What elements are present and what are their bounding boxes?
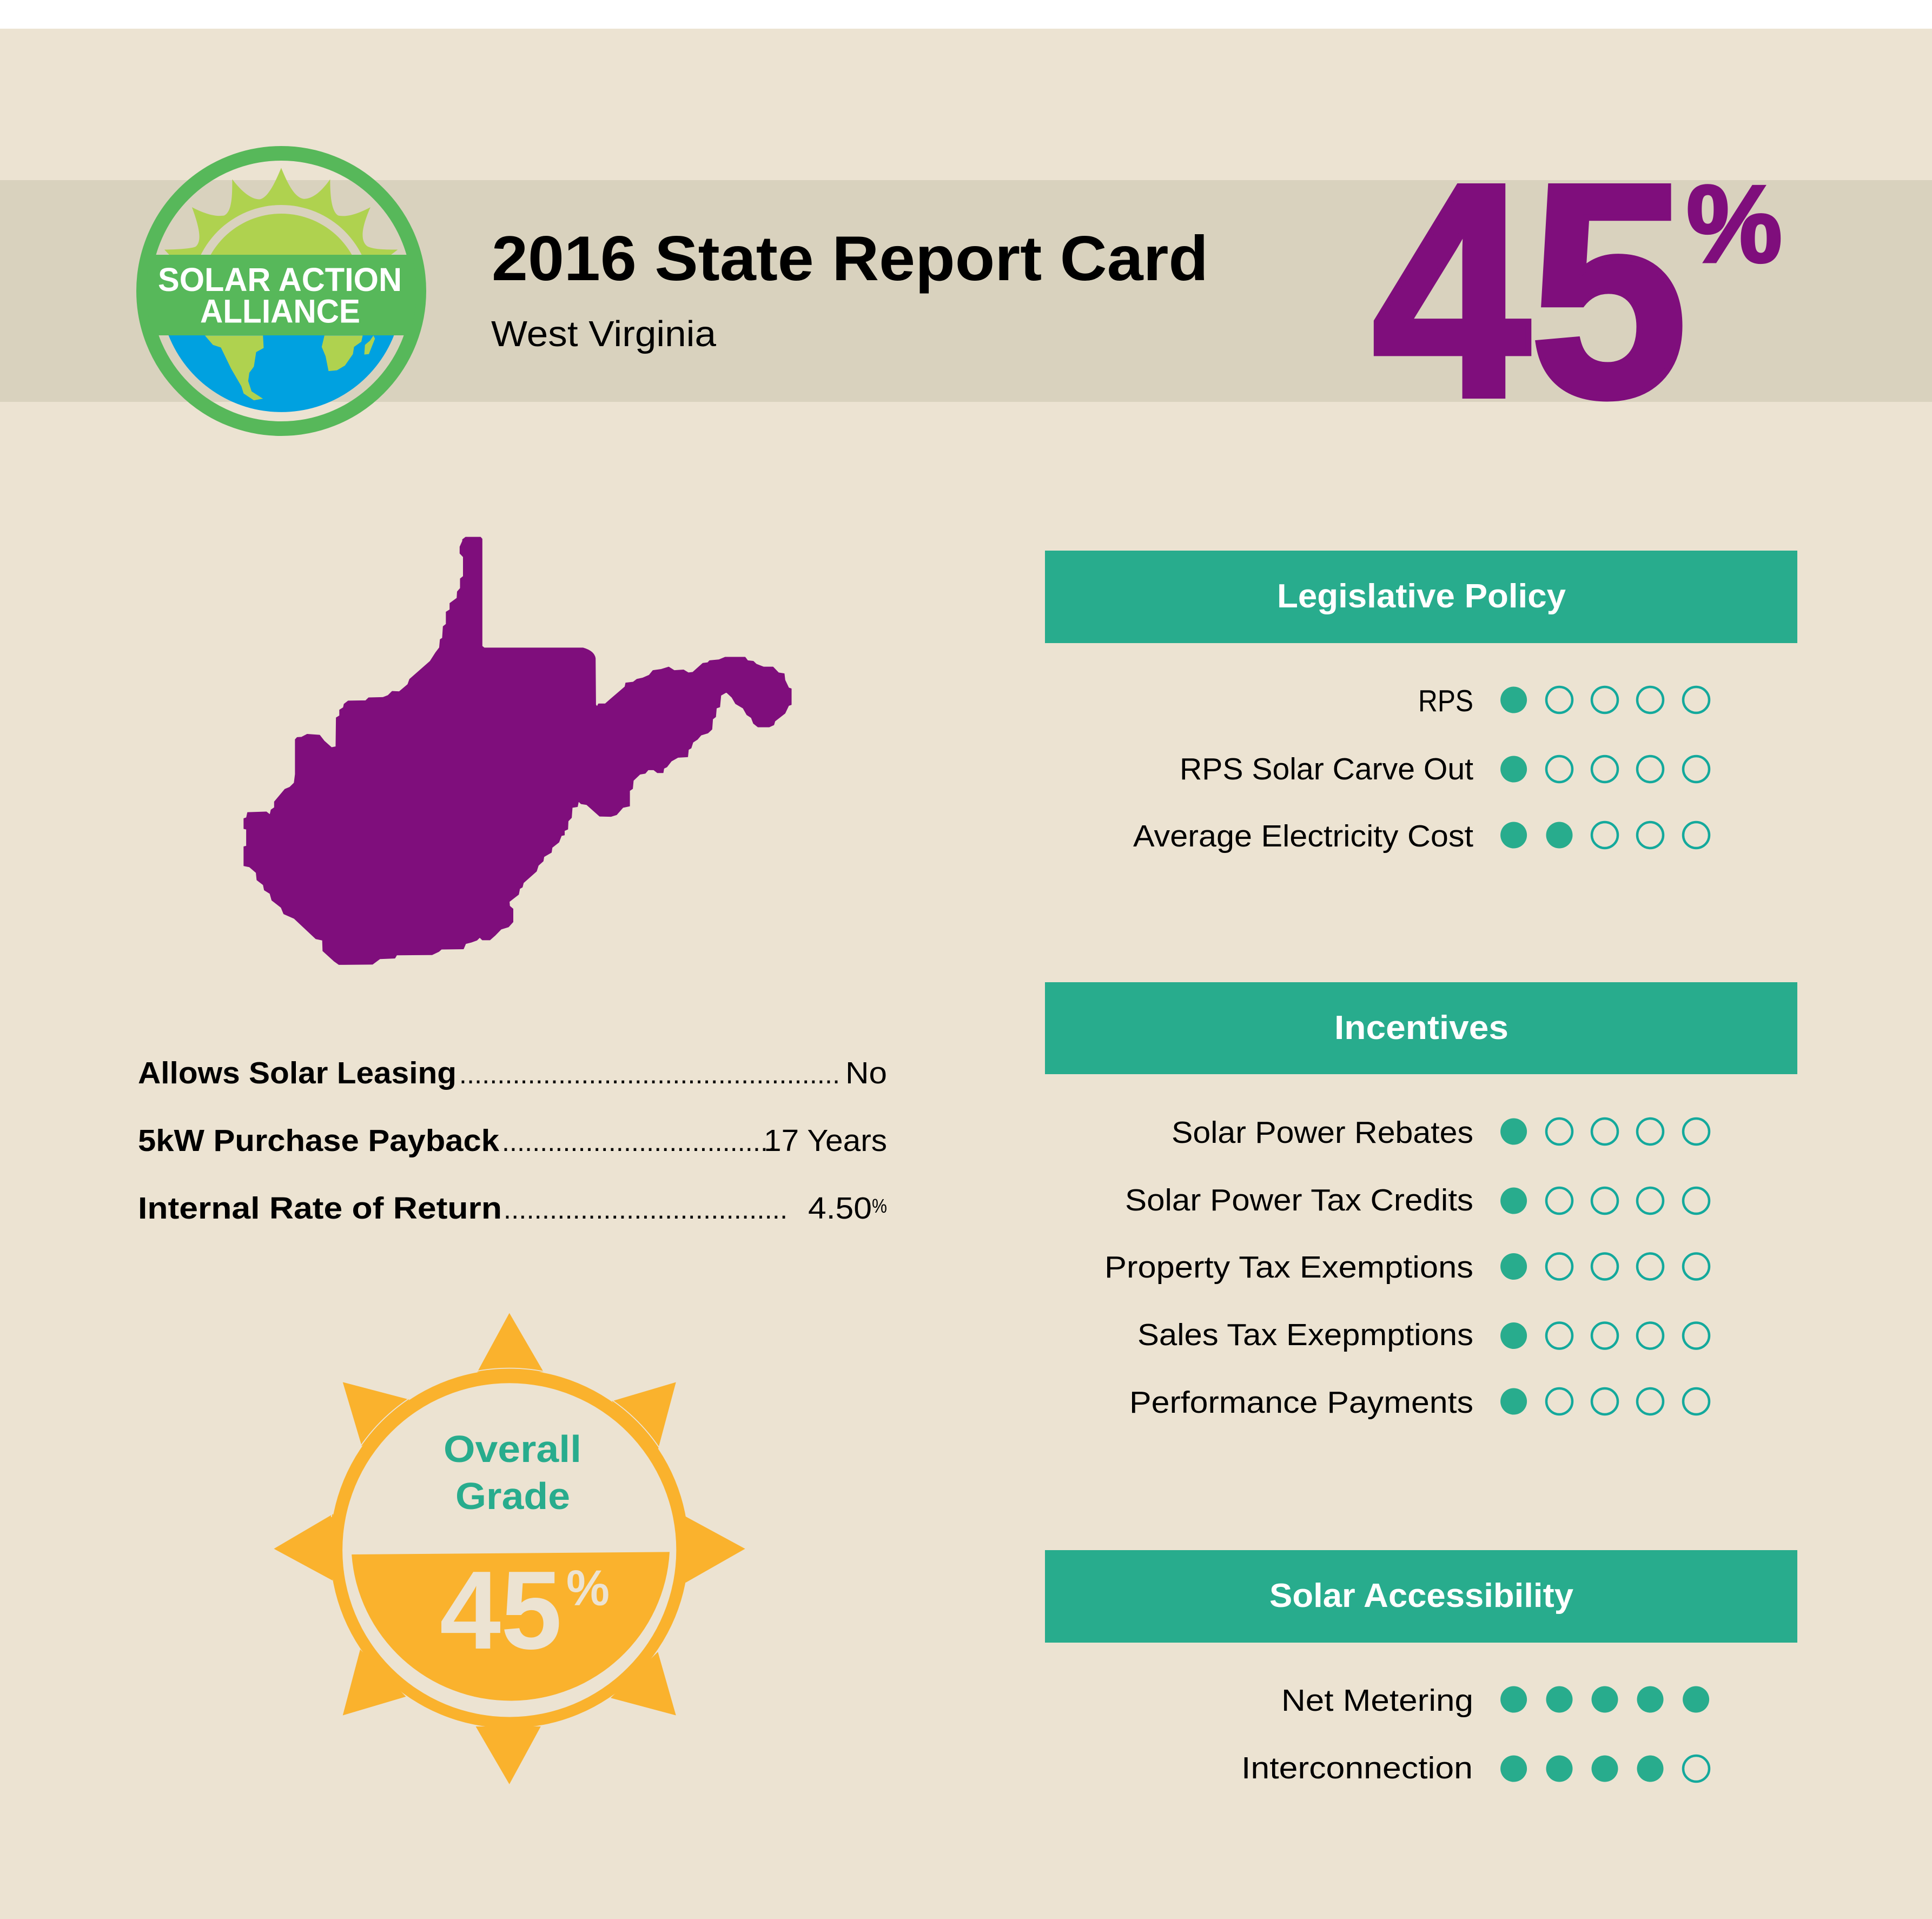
stat: 5kW purchase payback: .................................... (502, 1127, 776, 1157)
stat: 5kW purchase payback: 17 Years (764, 1123, 887, 1158)
row: solar power tax credits: Solar Power Tax Credits (1125, 1183, 1473, 1217)
badge score: 45 (440, 1548, 562, 1672)
heading: legislative policy: Legislative Policy (1277, 578, 1566, 615)
heading: incentives: Incentives (1334, 1009, 1508, 1047)
row: RPS solar carve out (1180, 752, 1709, 786)
logo wordmark: ALLIANCE (200, 293, 360, 330)
stat: allows solar leasing: No (845, 1056, 887, 1090)
stat: internal rate of return: % (872, 1195, 887, 1217)
row: property tax exemptions: Property Tax Exemptions (1104, 1250, 1473, 1285)
row: RPS: RPS (1418, 684, 1473, 718)
title: 2016 State Report Card (492, 223, 1208, 294)
row: property tax exemptions (1104, 1250, 1709, 1285)
badge label (444, 1428, 581, 1517)
map: West Virginia (244, 537, 791, 964)
badge label: Grade (455, 1475, 570, 1517)
row: sales tax exepmptions (1137, 1318, 1709, 1352)
stat: 5kW purchase payback (138, 1123, 887, 1158)
stat: internal rate of return (138, 1191, 887, 1226)
badge score: % (566, 1560, 610, 1616)
row: solar power rebates (1172, 1115, 1709, 1150)
logo globe (169, 335, 394, 412)
stat: internal rate of return: Internal Rate of Return (138, 1191, 502, 1226)
row: average electricity cost (1133, 819, 1709, 853)
row: average electricity cost: Average Electricity Cost (1133, 819, 1473, 853)
row: interconnection: Interconnection (1241, 1751, 1473, 1785)
heading: solar accessibility (1045, 1550, 1797, 1643)
panel: incentives (1045, 982, 1797, 1420)
panel: legislative policy (1045, 551, 1797, 853)
heading: legislative policy (1045, 551, 1797, 643)
logo ribbon (151, 255, 412, 335)
heading: solar accessibility: Solar Accessibility (1269, 1577, 1574, 1614)
row: solar power rebates: Solar Power Rebates (1172, 1115, 1473, 1150)
stats list (138, 1056, 887, 1226)
badge label: Overall (444, 1428, 581, 1470)
row: net metering: Net Metering (1281, 1683, 1473, 1718)
headline score 45%: 45 (1373, 121, 1688, 460)
logo sun (164, 168, 398, 255)
headline score 45%: % (1686, 163, 1782, 286)
row: net metering (1281, 1683, 1709, 1718)
logo wordmark (158, 261, 402, 330)
subtitle: state name: West Virginia (491, 314, 717, 354)
logo ring (144, 154, 419, 428)
stat: 5kW purchase payback: 5kW Purchase Payback (138, 1123, 499, 1158)
row: sales tax exepmptions: Sales Tax Exepmptions (1137, 1318, 1473, 1352)
stat: internal rate of return: 4.50 (808, 1191, 872, 1226)
stat: allows solar leasing (138, 1056, 887, 1090)
stat: allows solar leasing: Allows Solar Leasing (138, 1056, 456, 1090)
row: solar power tax credits (1125, 1183, 1709, 1217)
row: performance payments (1129, 1385, 1709, 1420)
row: RPS solar carve out: RPS Solar Carve Out (1180, 752, 1473, 786)
heading: incentives (1045, 982, 1797, 1074)
headline score 45% (1374, 183, 1781, 401)
logo wordmark: SOLAR ACTION (158, 261, 402, 298)
row: RPS (1418, 684, 1709, 718)
badge sun rays and ring (274, 1313, 745, 1784)
panel: solar accessibility (1045, 1550, 1797, 1785)
overall grade badge (274, 1313, 745, 1784)
stat: allows solar leasing: .................................................. (459, 1059, 840, 1089)
row: interconnection (1241, 1751, 1709, 1785)
row: performance payments: Performance Payments (1129, 1385, 1473, 1420)
stat: internal rate of return: ..................................... (504, 1194, 788, 1225)
logo: Solar Action Alliance (135, 154, 427, 428)
header band (0, 180, 1932, 402)
